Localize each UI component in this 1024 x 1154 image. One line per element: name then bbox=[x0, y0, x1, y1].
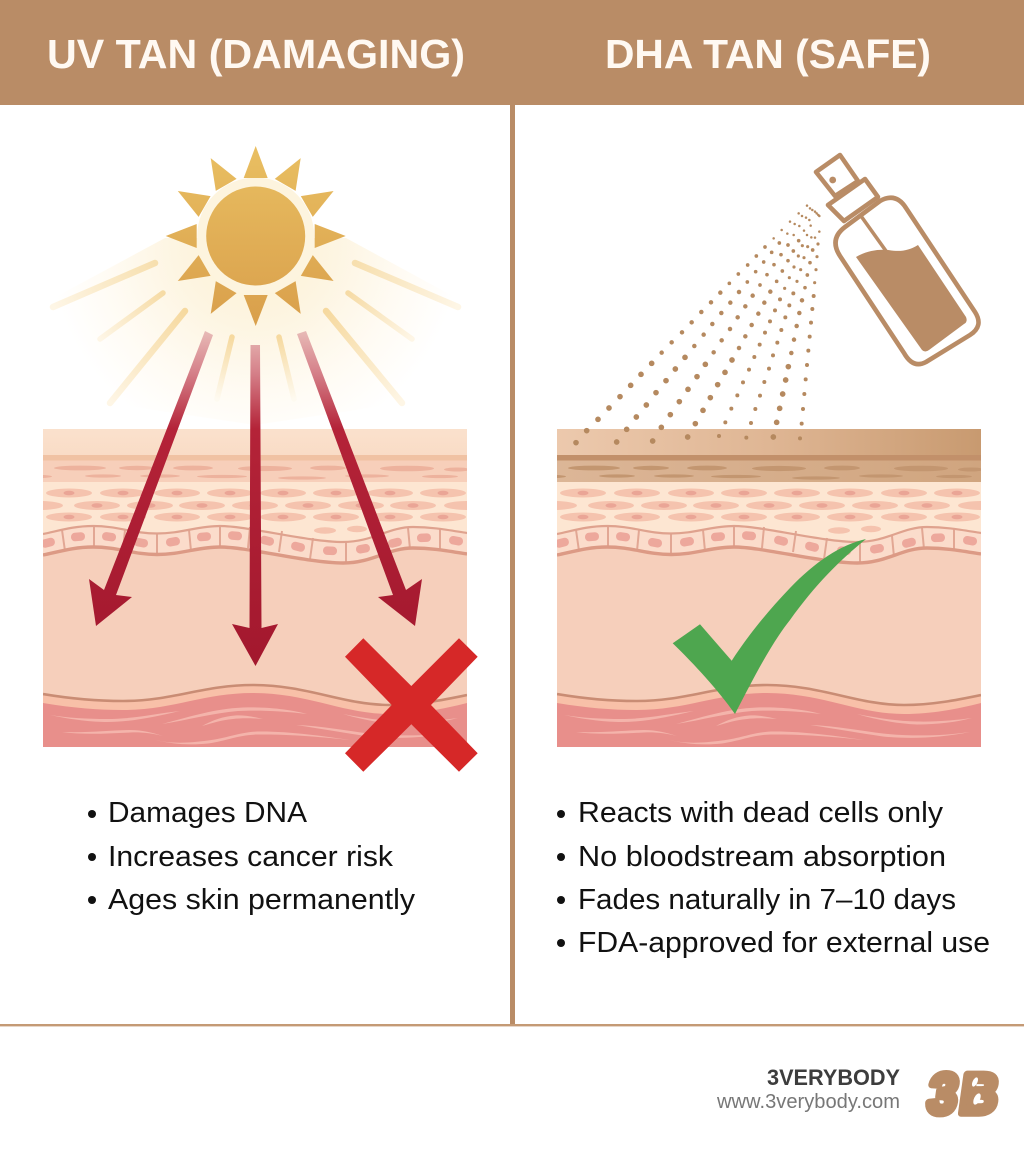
bullet list: DHA facts: No bloodstream absorption bbox=[578, 841, 946, 873]
bullet list: DHA facts: FDA-approved for external use bbox=[578, 927, 990, 959]
bullet list: UV effects bbox=[88, 797, 416, 916]
icon: red cross bbox=[345, 638, 478, 772]
bullet list: DHA facts bbox=[557, 797, 990, 959]
logo: 3B: B bbox=[956, 1062, 1003, 1125]
footer brand bbox=[716, 1062, 1003, 1125]
bullet list: UV effects: Ages skin permanently bbox=[108, 884, 416, 916]
icon: sun bbox=[166, 146, 346, 326]
bullet list: UV effects: Damages DNA bbox=[108, 797, 308, 829]
bullet list: DHA facts: Fades naturally in 7–10 days bbox=[578, 884, 956, 916]
bullet list: DHA facts: Reacts with dead cells only bbox=[578, 797, 944, 829]
logo: 3B: 3 bbox=[924, 1062, 962, 1125]
spray mist dots bbox=[576, 206, 819, 443]
arrow: UV ray centre bbox=[232, 345, 278, 666]
icon: green check mark bbox=[673, 539, 866, 714]
skin cross-section: DHA bbox=[557, 429, 981, 747]
centre divider bbox=[510, 105, 515, 1026]
logo: 3B bbox=[924, 1062, 1003, 1125]
heading: UV tan: UV TAN (DAMAGING) bbox=[47, 31, 465, 77]
heading: DHA tan: DHA TAN (SAFE) bbox=[605, 31, 931, 77]
panel: UV tan bbox=[17, 31, 490, 916]
footer rule bbox=[0, 1024, 1024, 1026]
brand name: 3VERYBODY bbox=[767, 1065, 900, 1090]
icon: spray bottle bbox=[816, 155, 979, 364]
skin cross-section: UV bbox=[43, 429, 467, 747]
arrow: UV ray right bbox=[297, 331, 422, 626]
panel: DHA tan bbox=[531, 31, 1004, 959]
light rays bbox=[53, 263, 458, 403]
website: www.3verybody.com bbox=[716, 1091, 900, 1113]
arrow: UV ray left bbox=[89, 331, 213, 626]
header band bbox=[0, 0, 1024, 105]
sun glow bbox=[40, 238, 470, 425]
bullet list: UV effects: Increases cancer risk bbox=[108, 841, 394, 873]
